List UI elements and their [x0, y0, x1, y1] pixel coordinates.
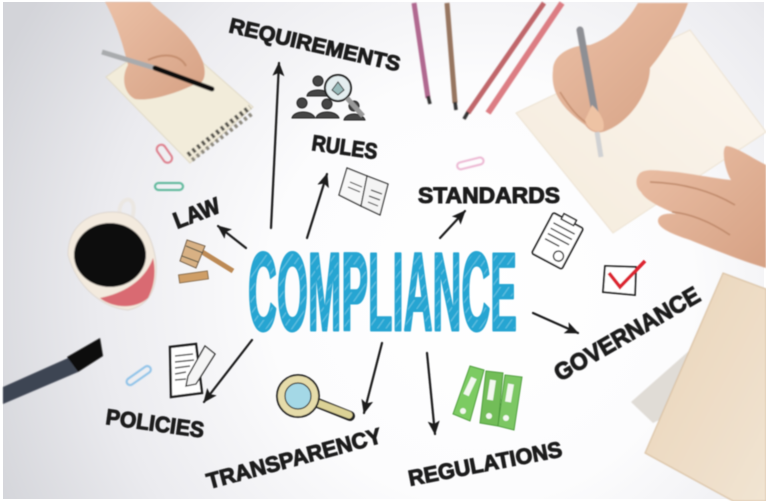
icon: magnifying glass [277, 375, 350, 417]
label: law: LAW [169, 192, 224, 234]
arrow: to law [218, 226, 246, 248]
arrow: to regulations [427, 353, 435, 434]
arrow: to rules [307, 174, 327, 238]
left hand writing [105, 2, 205, 100]
black and silver pen [102, 52, 212, 89]
arrow: to standards [440, 211, 465, 238]
icon: red check box [603, 261, 645, 295]
arrow: to transparency [364, 343, 382, 413]
gray paper [631, 350, 700, 423]
icon: clipboard [532, 209, 585, 269]
label: regulations: REGULATIONS [406, 437, 564, 491]
label: policies: POLICIES [104, 404, 206, 443]
paperclips [125, 143, 484, 386]
icon: document with pencil [170, 344, 215, 397]
writing paper [516, 30, 766, 233]
arrow: to requirements [271, 63, 279, 228]
icon: green binders [453, 366, 522, 430]
label: requirements: REQUIREMENTS [227, 14, 403, 76]
arrows [204, 63, 578, 434]
topic labels [104, 14, 705, 494]
tan envelope [645, 273, 766, 501]
coffee cup [68, 200, 156, 310]
label: rules: RULES [310, 130, 379, 164]
pencils [414, 3, 562, 119]
icon: people and magnifier [292, 75, 365, 120]
sketched icons [170, 75, 645, 430]
label: governance: GOVERNANCE [550, 282, 705, 387]
right hand with pen [553, 3, 688, 157]
notepad [106, 32, 253, 163]
icon: gavel [179, 240, 233, 283]
icon: open book [339, 168, 388, 215]
arrow: to policies [204, 340, 252, 402]
label: standards: STANDARDS [418, 183, 560, 208]
black marker [3, 338, 103, 404]
arrow: to governance [533, 313, 578, 333]
right hand resting [636, 146, 766, 268]
label: transparency: TRANSPARENCY [204, 423, 384, 494]
